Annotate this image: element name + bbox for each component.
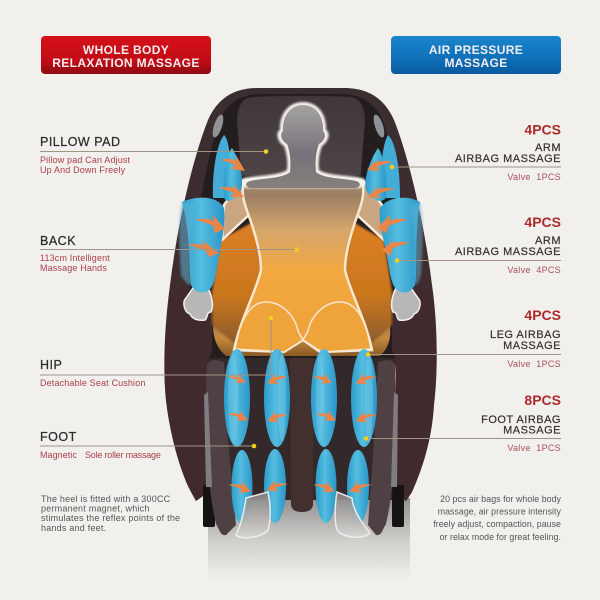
right shoulder sensor xyxy=(371,113,387,139)
callout: leg airbag: Valve 1PCS xyxy=(507,359,561,369)
lower leg airbag 1 xyxy=(232,450,252,524)
callout: foot: Sole roller massage xyxy=(85,450,161,460)
right upper arm airbags xyxy=(365,135,400,201)
callout: hip: Detachable Seat Cushion xyxy=(40,378,146,388)
left upper arm xyxy=(222,180,250,240)
arrow left 3 xyxy=(195,214,225,233)
leg arrow 8 xyxy=(355,411,377,422)
right side glow xyxy=(344,222,392,345)
left forearm airbag xyxy=(179,198,225,293)
left grey strip xyxy=(204,392,212,487)
callout: leg airbag: 4PCS xyxy=(524,307,561,323)
lower leg airbag 4 xyxy=(347,450,369,524)
left hand xyxy=(184,288,212,320)
text: magnet note: permanent magnet, which xyxy=(41,504,150,514)
arm airbags xyxy=(179,135,423,293)
seat cushion xyxy=(213,319,390,356)
header: air pressure massage xyxy=(391,36,561,74)
callout: arm airbag 1: ARM xyxy=(535,142,561,154)
white head and shoulders outline xyxy=(240,102,366,188)
text: airbag note: or relax mode for great feeling. xyxy=(440,532,561,542)
leg arrow 3 xyxy=(267,373,288,384)
text: airbag note: freely adjust, compaction, pause xyxy=(433,519,561,529)
foot arrow 2 xyxy=(266,480,288,491)
text: airbag note xyxy=(433,494,562,542)
headrest pad xyxy=(237,96,365,176)
arrow right 4 xyxy=(382,240,410,256)
lower leg airbag 2 xyxy=(264,449,286,523)
calf troughs xyxy=(208,358,396,500)
callout: pillow pad: PILLOW PAD xyxy=(40,135,120,149)
arrow left 1 xyxy=(220,155,245,171)
right foot xyxy=(335,492,370,537)
header: air pressure massage: MASSAGE xyxy=(444,56,508,70)
leg rest xyxy=(203,358,404,535)
leg arrow 7 xyxy=(355,373,377,384)
callout: arm airbag 2: ARM xyxy=(535,235,561,247)
left side roll xyxy=(206,360,236,535)
right forearm airbag xyxy=(380,198,423,293)
header: whole body relaxation massage: RELAXATION MASSAGE xyxy=(52,56,200,70)
callout: pillow pad: Pillow pad Can Adjust xyxy=(40,155,131,165)
body silhouette xyxy=(184,102,420,352)
upper leg airbag 1 xyxy=(224,349,250,447)
callout: back xyxy=(40,234,299,273)
callout: arm airbag 1: Valve 1PCS xyxy=(507,172,561,182)
upper leg airbag 3 xyxy=(311,349,337,447)
left shoulder sensor xyxy=(210,113,226,139)
callout: arm airbag 2: AIRBAG MASSAGE xyxy=(455,246,561,258)
leg arrow 1 xyxy=(227,374,246,383)
callout: arm airbag 1: 4PCS xyxy=(524,122,561,138)
arrow right 2 xyxy=(367,186,395,198)
left foot xyxy=(236,492,270,538)
callout: arm airbag 1 xyxy=(390,122,561,182)
foot arrow 1 xyxy=(228,481,251,493)
callout: foot airbag: MASSAGE xyxy=(503,424,561,436)
upper leg airbag 4 xyxy=(351,349,377,447)
callout: arm airbag 2 xyxy=(395,214,561,275)
left side glow xyxy=(212,222,262,345)
right hip xyxy=(303,302,371,352)
foot arrow 4 xyxy=(349,481,372,493)
leg airbags xyxy=(224,349,377,524)
leg arrow 2 xyxy=(227,410,248,421)
torso xyxy=(234,177,372,352)
callout: arm airbag 2: 4PCS xyxy=(524,214,561,230)
text: magnet note xyxy=(41,494,180,533)
text: magnet note: stimulates the reflex points of the xyxy=(41,513,180,523)
callout: foot: Magnetic xyxy=(40,450,77,460)
arrow left 2 xyxy=(218,184,244,197)
chair outer shell xyxy=(164,88,437,501)
upper leg airbag 2 xyxy=(264,349,290,447)
base floor shadow xyxy=(208,498,410,580)
callout: arm airbag 2: Valve 4PCS xyxy=(507,265,561,275)
callout: leg airbag xyxy=(366,307,561,369)
right grey strip xyxy=(391,392,398,487)
chair inner cavity xyxy=(190,94,412,365)
arrow right 3 xyxy=(377,214,408,233)
callout: pillow pad xyxy=(40,135,268,175)
text: magnet note: hands and feet. xyxy=(41,523,106,533)
right side roll xyxy=(368,360,396,535)
text: magnet note: The heel is fitted with a 300CC xyxy=(41,494,171,504)
callout: back: Massage Hands xyxy=(40,263,107,273)
feet xyxy=(236,492,370,538)
right upper arm xyxy=(356,180,384,240)
left hip xyxy=(235,302,303,352)
text: airbag note: 20 pcs air bags for whole body xyxy=(440,494,562,504)
right black frame xyxy=(392,485,404,527)
header: whole body relaxation massage xyxy=(41,36,211,74)
lower leg airbag 3 xyxy=(316,449,336,523)
callout: leg airbag: LEG AIRBAG xyxy=(490,329,561,341)
callout: leg airbag: MASSAGE xyxy=(503,340,561,352)
arrow right 1 xyxy=(367,159,393,171)
left upper arm airbags xyxy=(213,135,242,201)
centre divider xyxy=(290,358,314,512)
callout: foot xyxy=(40,430,256,460)
right hand xyxy=(392,288,420,320)
callout: foot airbag xyxy=(364,392,561,453)
callout: hip: HIP xyxy=(40,358,62,372)
text: airbag note: massage, air pressure intensity xyxy=(438,506,562,516)
leg arrow 4 xyxy=(267,411,288,422)
callout: back: 113cm Intelligent xyxy=(40,253,110,263)
header: air pressure massage: AIR PRESSURE xyxy=(429,43,523,57)
callout: arm airbag 1: AIRBAG MASSAGE xyxy=(455,153,561,165)
foot arrow 3 xyxy=(313,481,335,492)
callout: back: BACK xyxy=(40,234,76,248)
leg arrow 6 xyxy=(315,410,336,421)
callout: hip xyxy=(40,316,273,388)
head and neck xyxy=(246,105,360,188)
leg arrow 5 xyxy=(312,373,332,384)
left arm panel xyxy=(164,290,212,501)
massage chair xyxy=(164,88,437,501)
arrow left 4 xyxy=(187,241,219,257)
left black frame xyxy=(203,485,215,527)
callout: foot airbag: FOOT AIRBAG xyxy=(481,414,561,426)
orange pressure arrows xyxy=(187,155,410,493)
callout: pillow pad: Up And Down Freely xyxy=(40,165,126,175)
right arm panel xyxy=(392,290,437,501)
callout: foot airbag: 8PCS xyxy=(524,392,561,408)
header: whole body relaxation massage: WHOLE BODY xyxy=(83,43,169,57)
callout: foot: FOOT xyxy=(40,430,77,444)
callout: foot airbag: Valve 1PCS xyxy=(507,443,561,453)
